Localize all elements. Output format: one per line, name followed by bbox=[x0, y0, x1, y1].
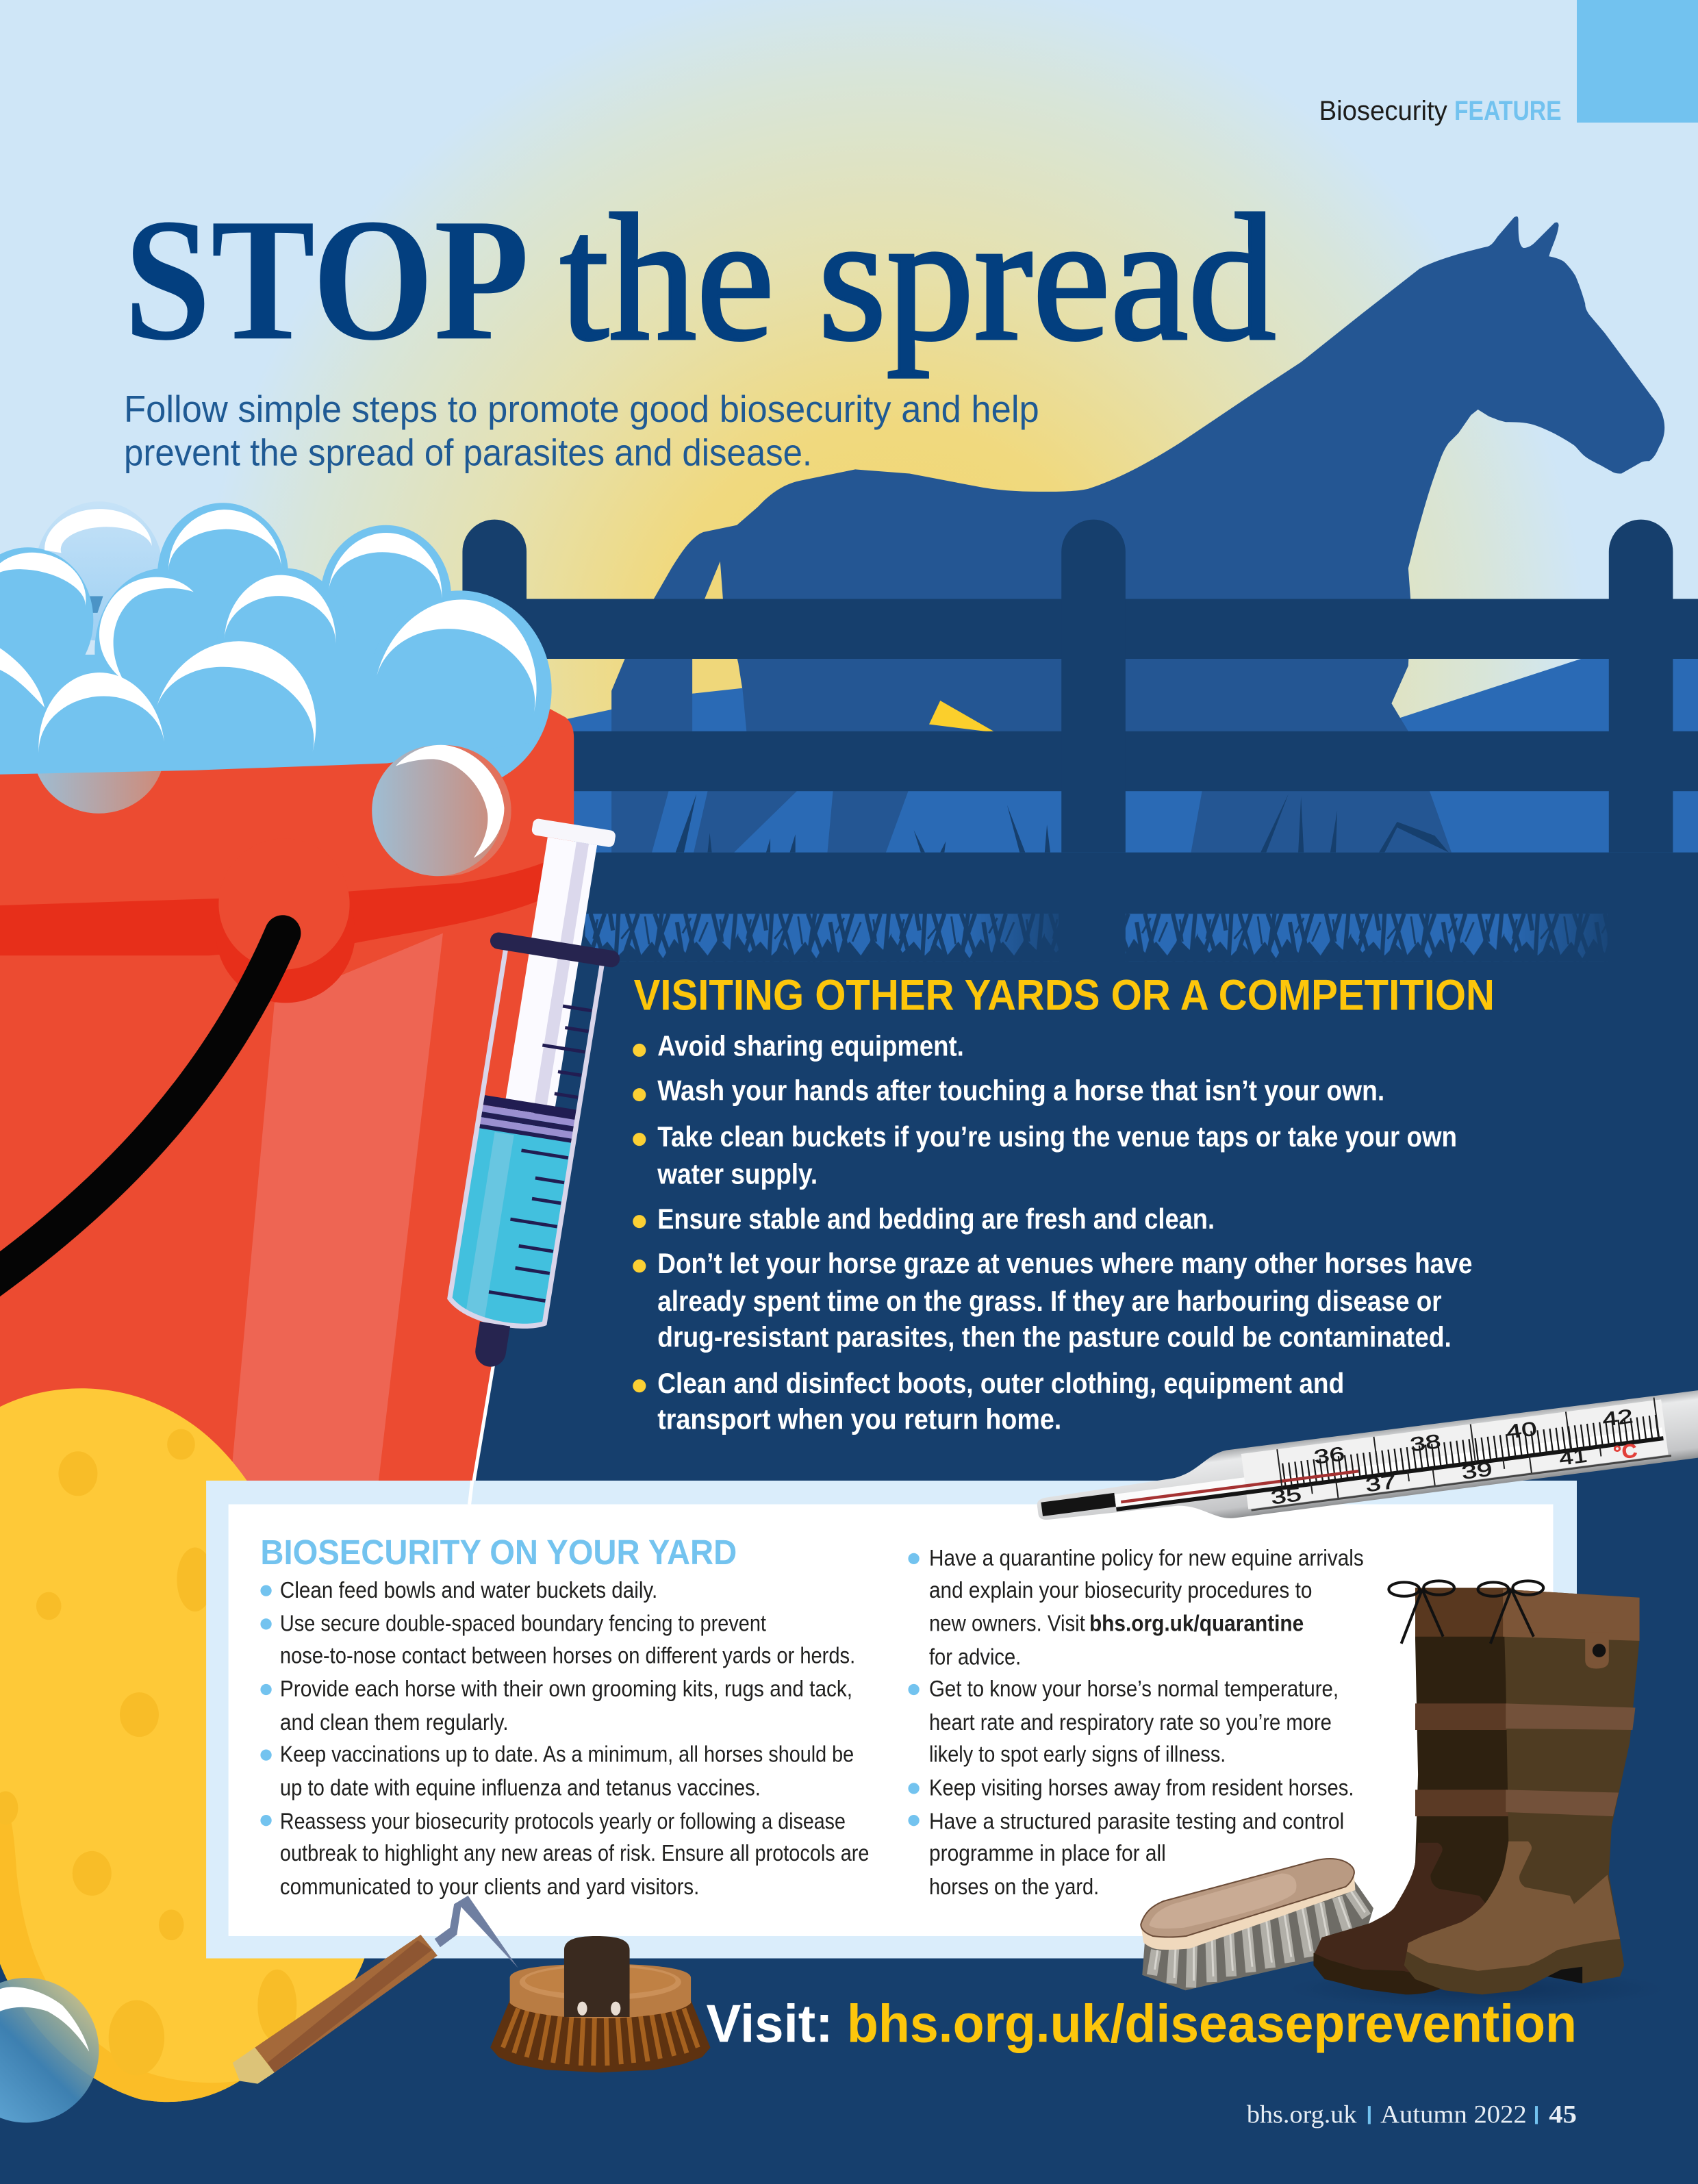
visiting list: Avoid sharing equipment. bbox=[657, 1030, 964, 1062]
right boot bbox=[1404, 1590, 1640, 1994]
footer: Autumn 2022 bbox=[1380, 2100, 1527, 2129]
right column text: for advice. bbox=[929, 1644, 1021, 1670]
syringe bbox=[424, 814, 639, 1377]
left column text: outbreak to highlight any new areas of risk. Ensure all protocols are bbox=[280, 1841, 869, 1866]
yellow bullets bbox=[633, 1044, 646, 1392]
thermometer: 38 bbox=[1409, 1431, 1442, 1456]
hillside bbox=[529, 620, 1698, 892]
right column text: likely to spot early signs of illness. bbox=[929, 1742, 1226, 1768]
section label: Biosecurity bbox=[1319, 96, 1447, 126]
right column text: bhs.org.uk/quarantine bbox=[1089, 1611, 1304, 1637]
left column text: Clean feed bowls and water buckets daily. bbox=[280, 1578, 657, 1603]
boots bbox=[1313, 1581, 1640, 1994]
body brush, dark bbox=[490, 1936, 711, 2072]
title: the spread bbox=[560, 177, 1276, 378]
thin needle bbox=[470, 1358, 494, 1507]
footer: bhs.org.uk bbox=[1247, 2100, 1357, 2129]
visiting list: water supply. bbox=[657, 1158, 818, 1190]
bubble on bucket bbox=[372, 745, 511, 876]
subtitle bbox=[124, 388, 1039, 473]
sun glow bbox=[0, 0, 1698, 975]
title: STOP bbox=[124, 183, 529, 377]
corner tab bbox=[1577, 0, 1698, 123]
thermometer: 37 bbox=[1365, 1471, 1397, 1496]
right column text: heart rate and respiratory rate so you’re more bbox=[929, 1710, 1332, 1735]
heading: visiting other yards: VISITING OTHER YARDS OR A COMPETITION bbox=[634, 972, 1495, 1020]
grass strip bbox=[585, 914, 1609, 961]
hoof pick bbox=[233, 1896, 518, 2084]
visiting list bbox=[657, 1030, 1472, 1435]
left column text: nose-to-nose contact between horses on different yards or herds. bbox=[280, 1643, 855, 1668]
visiting list: Clean and disinfect boots, outer clothing, equipment and bbox=[657, 1367, 1344, 1399]
right column text: Get to know your horse’s normal temperature, bbox=[929, 1677, 1339, 1702]
left column text: communicated to your clients and yard visitors. bbox=[280, 1874, 699, 1900]
right column text bbox=[929, 1546, 1364, 1900]
panel heading: BIOSECURITY ON YOUR YARD bbox=[260, 1533, 737, 1572]
section label bbox=[1319, 96, 1562, 126]
section label: FEATURE bbox=[1454, 96, 1562, 126]
gap lower hill bbox=[692, 688, 746, 733]
left column text: Provide each horse with their own grooming kits, rugs and tack, bbox=[280, 1677, 852, 1702]
horse silhouette bbox=[611, 216, 1664, 853]
visiting list: Don’t let your horse graze at venues where many other horses have bbox=[657, 1247, 1472, 1279]
bucket bbox=[0, 709, 574, 1518]
visiting list: Wash your hands after touching a horse that isn’t your own. bbox=[657, 1075, 1384, 1107]
call to action: Visit: bbox=[706, 1994, 833, 2054]
needle over panel bbox=[470, 1481, 472, 1505]
right column text: Have a quarantine policy for new equine arrivals bbox=[929, 1546, 1364, 1571]
right column bullets bbox=[908, 1553, 920, 1826]
thermometer bbox=[1033, 1388, 1698, 1543]
subtitle: Follow simple steps to promote good biosecurity and help bbox=[124, 388, 1039, 430]
left column text bbox=[280, 1578, 869, 1900]
gap between tail and hind leg bbox=[692, 562, 742, 694]
visiting list: Take clean buckets if you’re using the venue taps or take your own bbox=[657, 1120, 1457, 1153]
info panel: biosecurity on your yard bbox=[206, 1481, 1577, 1959]
thermometer: 36 bbox=[1313, 1443, 1346, 1468]
visiting list: Ensure stable and bedding are fresh and clean. bbox=[657, 1203, 1215, 1235]
footer: 45 bbox=[1549, 2100, 1577, 2129]
foam bbox=[0, 501, 552, 814]
right column text: new owners. Visit bbox=[929, 1611, 1085, 1637]
left column text: Use secure double-spaced boundary fencing to prevent bbox=[280, 1611, 767, 1637]
fence bbox=[462, 520, 1698, 922]
visiting list: already spent time on the grass. If they are harbouring disease or bbox=[657, 1285, 1442, 1317]
sponge bbox=[0, 1388, 365, 2102]
title bbox=[124, 177, 1276, 378]
bubble over sponge bbox=[0, 1978, 99, 2123]
thermometer: 35 bbox=[1269, 1483, 1303, 1509]
gap under belly bbox=[929, 701, 996, 733]
thermometer: °C bbox=[1612, 1440, 1638, 1464]
right column text: Have a structured parasite testing and control bbox=[929, 1809, 1344, 1834]
right column text: programme in place for all bbox=[929, 1841, 1166, 1866]
left column bullets bbox=[260, 1585, 272, 1826]
laces bbox=[1389, 1581, 1543, 1644]
right column text: Keep visiting horses away from resident horses. bbox=[929, 1776, 1354, 1801]
left column text: up to date with equine influenza and tetanus vaccines. bbox=[280, 1776, 761, 1801]
left column text: Keep vaccinations up to date. As a minimum, all horses should be bbox=[280, 1742, 854, 1768]
boot shadow bbox=[1289, 1970, 1664, 2009]
left column text: Reassess your biosecurity protocols yearly or following a disease bbox=[280, 1809, 846, 1834]
grass blades behind fence bbox=[676, 794, 1449, 853]
right column text: and explain your biosecurity procedures to bbox=[929, 1578, 1312, 1603]
grooming brush, light bbox=[1141, 1859, 1373, 1990]
subtitle: prevent the spread of parasites and disease. bbox=[124, 431, 812, 473]
visiting list: drug-resistant parasites, then the pasture could be contaminated. bbox=[657, 1321, 1452, 1353]
call to action: bhs.org.uk/diseaseprevention bbox=[847, 1994, 1577, 2054]
visiting list: transport when you return home. bbox=[657, 1403, 1061, 1435]
thermometer: 42 bbox=[1601, 1405, 1634, 1431]
left column text: and clean them regularly. bbox=[280, 1710, 509, 1735]
thermometer: 41 bbox=[1558, 1445, 1588, 1470]
thermometer: 39 bbox=[1460, 1458, 1493, 1484]
footer bbox=[1247, 2100, 1577, 2129]
thermometer: 40 bbox=[1505, 1418, 1538, 1444]
left boot bbox=[1313, 1588, 1511, 1994]
right column text: horses on the yard. bbox=[929, 1874, 1099, 1900]
navy lower background bbox=[459, 914, 1698, 2184]
